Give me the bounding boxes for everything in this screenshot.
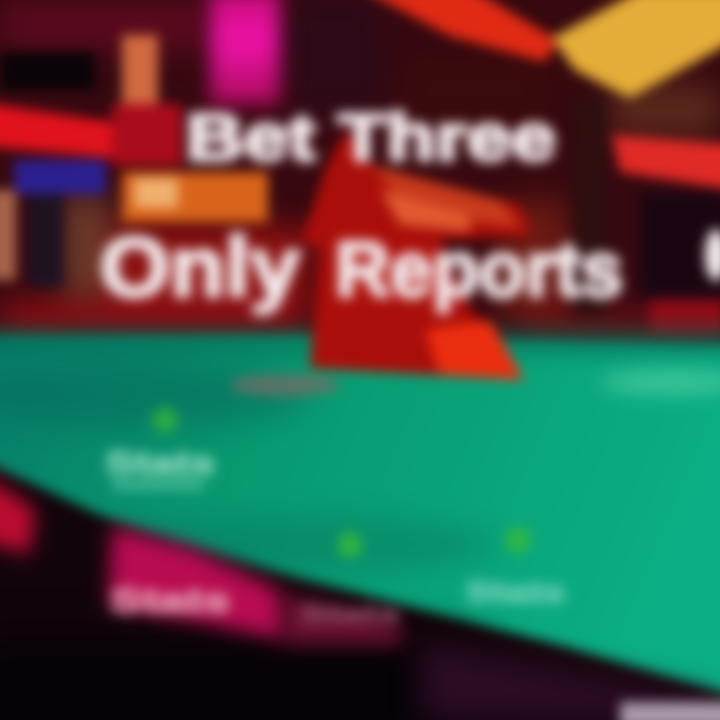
panel: ceiling lights and decor	[0, 0, 720, 334]
text block: lower rail labels: Stats	[110, 582, 230, 620]
title: headline	[100, 100, 720, 314]
icon: red rail glow	[0, 472, 36, 555]
stat block: right table label	[465, 527, 565, 609]
panel: green table felt	[0, 328, 720, 700]
icon: right marker	[505, 527, 531, 553]
icon: dark column	[28, 195, 64, 287]
icon: orange glow	[122, 172, 268, 222]
panel: dark foreground rail	[0, 462, 720, 720]
panel: background room	[0, 0, 720, 350]
icon: left marker	[152, 407, 178, 433]
title: headline: Reports	[335, 225, 623, 313]
stat block: left table label: Stats	[105, 445, 215, 481]
icon: top red streak	[360, 0, 558, 62]
text block: lower rail labels	[110, 582, 400, 628]
icon: centre marker	[337, 532, 363, 558]
icon: left tan column	[0, 190, 16, 280]
icon: red block	[112, 104, 182, 166]
text block: lower rail labels: Stats	[300, 601, 400, 628]
icon: left red band	[0, 102, 112, 158]
icon: bottom right highlight	[620, 702, 720, 720]
icon: peach lamp	[122, 35, 158, 107]
stat block: left table label	[105, 407, 215, 490]
icon: brown pillar	[572, 95, 606, 315]
icon: blue panel	[14, 160, 106, 194]
stat block: centre table label	[337, 532, 363, 558]
title: headline: Only	[100, 220, 300, 314]
icon: magenta light column	[210, 0, 280, 105]
stat block: right table label: Stats	[465, 576, 565, 609]
icon: gold canopy	[552, 0, 720, 98]
title: headline: Bet Three	[186, 100, 556, 174]
icon: dark left panel	[0, 52, 95, 90]
icon: central red tree	[230, 130, 532, 396]
icon: right red band	[612, 135, 720, 190]
icon: magenta rail glow	[108, 526, 285, 640]
icon: right dark doorway	[640, 192, 720, 297]
